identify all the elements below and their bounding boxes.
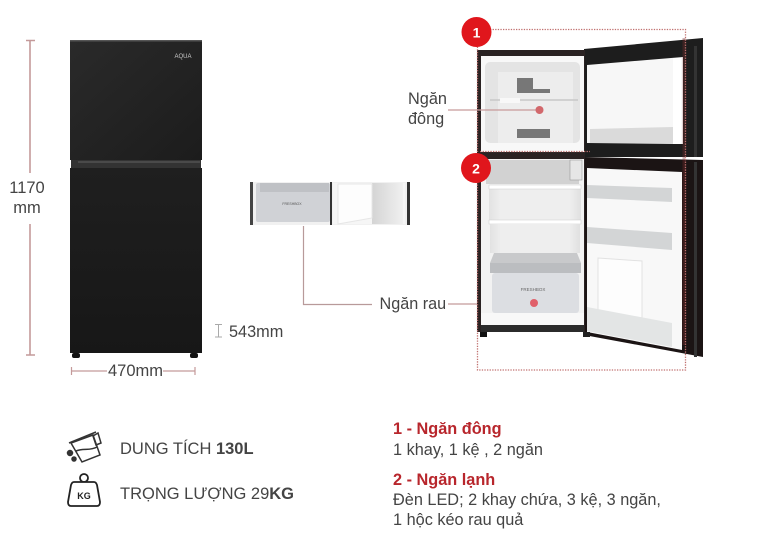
fridge spec: 2 - Ngăn lạnh <box>393 471 495 489</box>
front view fridge <box>70 40 202 358</box>
icon: measuring jug <box>68 432 101 462</box>
badge 1 <box>462 17 492 47</box>
leader line: Ngăn rau <box>304 226 531 313</box>
badge 2 <box>461 153 491 183</box>
crisper detail inset: FRESHBOX <box>282 202 302 206</box>
crisper detail inset <box>250 182 410 225</box>
icon: weight KG: KG <box>77 491 91 501</box>
freezer spec: 1 khay, 1 kệ , 2 ngăn <box>393 441 543 459</box>
weight text: TRỌNG LƯỢNG 29KG <box>120 485 294 503</box>
fridge spec <box>393 471 661 529</box>
capacity text: DUNG TÍCH 130L <box>120 439 254 458</box>
height dimension: 1170 mm: mm <box>13 199 41 217</box>
leader line: Ngăn rau: Ngăn rau <box>380 295 446 313</box>
label: Ngăn đông <box>408 90 447 128</box>
fridge compartment <box>477 157 590 337</box>
label: Ngăn đông: Ngăn <box>408 90 447 108</box>
width dimension: 470mm: 470mm <box>108 362 163 380</box>
open fridge <box>477 38 703 357</box>
depth dimension: 543mm: 543mm <box>229 323 283 341</box>
freezer spec: 1 - Ngăn đông <box>393 420 502 438</box>
fridge spec: 1 hộc kéo rau quả <box>393 511 524 529</box>
red tint over door edges <box>682 38 686 345</box>
marker: Ngăn rau <box>530 299 538 307</box>
freezer spec <box>393 420 543 459</box>
dotted outline <box>478 30 686 370</box>
height dimension: 1170 mm: 1170 <box>9 179 45 197</box>
badge 2: 2 <box>472 160 480 176</box>
lower door <box>584 157 703 357</box>
badge 1: 1 <box>473 24 481 40</box>
leader line: Ngăn đông <box>448 106 544 114</box>
fridge compartment: FRESHBOX <box>521 287 545 292</box>
freezer compartment <box>477 50 585 157</box>
label: Ngăn đông: đông <box>408 110 444 128</box>
fridge spec: Đèn LED; 2 khay chứa, 3 kệ, 3 ngăn, <box>393 491 661 509</box>
icon: weight KG <box>68 474 100 506</box>
upper door <box>584 38 703 157</box>
width dimension: 470mm <box>71 362 195 380</box>
AQUA logo: AQUA <box>174 54 192 60</box>
height dimension: 1170 mm <box>9 40 45 355</box>
